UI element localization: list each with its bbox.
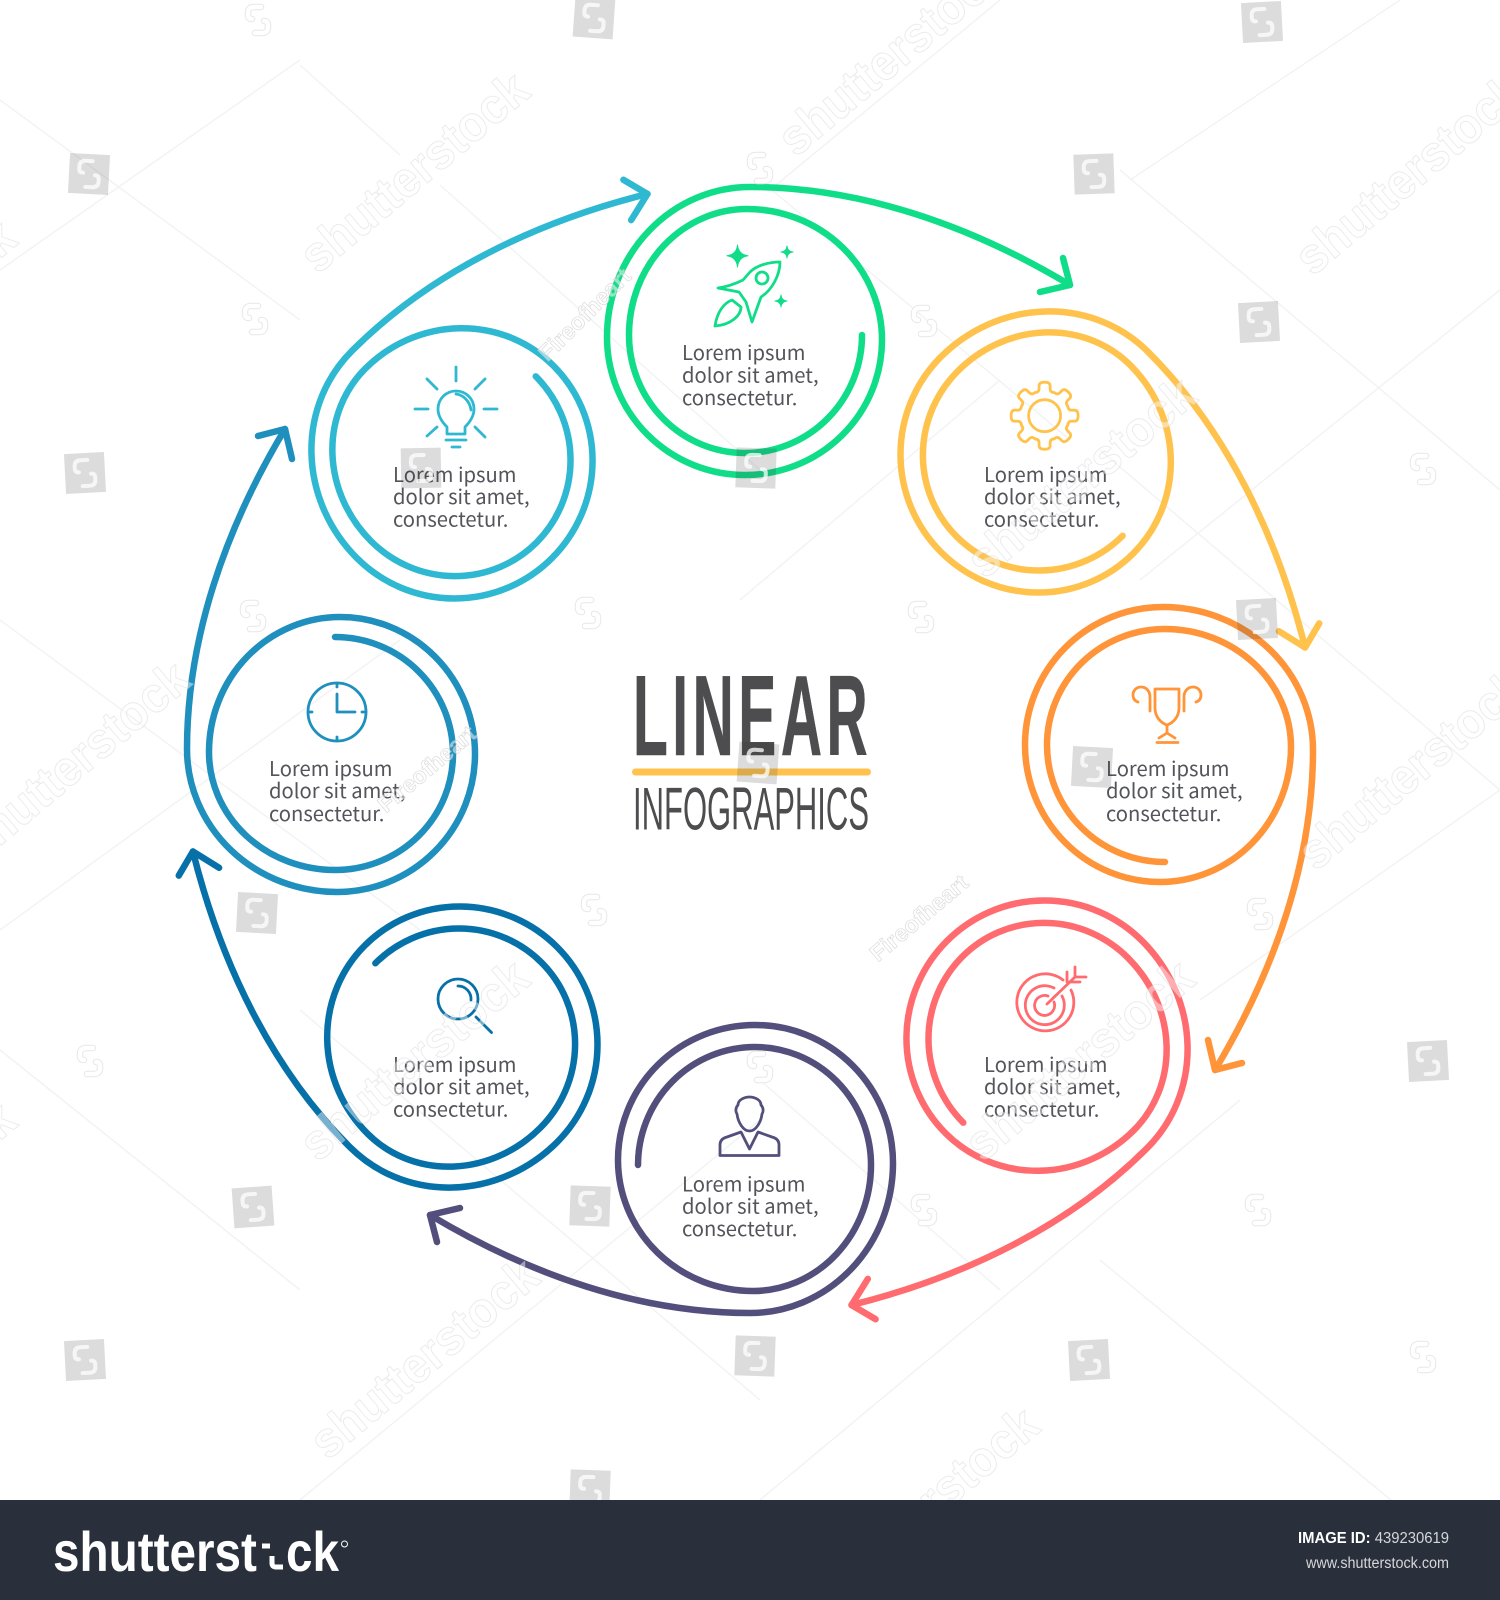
- text: step 4: Lorem ipsum: [984, 1049, 1107, 1078]
- panel: step 5 person: [430, 1025, 893, 1313]
- text: step 5: dolor sit amet,: [682, 1190, 819, 1220]
- icon: trophy: [1133, 687, 1201, 742]
- text: step 2: dolor sit amet,: [984, 481, 1121, 510]
- panel: step 6 magnifier: [124, 717, 655, 1248]
- chart: eight-step circular flow: [124, 125, 1374, 1374]
- subheading: INFOGRAPHICS: INFOGRAPHICS: [633, 776, 869, 842]
- footer logo: shutterstock: shutterstock: [53, 1520, 340, 1583]
- title block: [632, 653, 872, 842]
- text: step 1: Lorem ipsum: [682, 337, 805, 366]
- text: step 8: Lorem ipsum: [393, 459, 516, 488]
- spiral ring with arrow: green: [607, 187, 1070, 475]
- text: step 7: consectetur.: [269, 798, 384, 827]
- title underline: [632, 768, 871, 776]
- text: step 3: Lorem ipsum: [1106, 753, 1229, 782]
- icon: clock: [308, 683, 366, 741]
- text: step 6: consectetur.: [393, 1094, 508, 1122]
- watermark layer: Fireofheart: [372, 720, 481, 817]
- panel: step 8 light bulb: [251, 125, 782, 656]
- watermark layer: shutterstock: [954, 948, 1204, 1171]
- panel: step 2 gear: [843, 251, 1374, 782]
- watermark layer: shutterstock: [956, 365, 1206, 588]
- spiral ring with arrow: mid blue: [187, 429, 475, 892]
- footer image id: IMAGE ID: 439230619: [1298, 1530, 1449, 1547]
- watermark layer: shutterstock: [289, 948, 539, 1171]
- text: step 8: consectetur.: [393, 504, 508, 532]
- text: step 4: dolor sit amet,: [984, 1071, 1121, 1100]
- icon: light bulb: [415, 367, 497, 447]
- spiral ring with arrow: red: [717, 843, 1248, 1374]
- watermark layer: Fireofheart: [533, 262, 636, 366]
- watermark layer: shutterstock: [299, 1246, 549, 1469]
- text: step 4: consectetur.: [984, 1094, 1099, 1122]
- panel: step 3 trophy: [1025, 607, 1313, 1070]
- watermark layer: shutterstock: [289, 60, 539, 283]
- text: step 6: dolor sit amet,: [393, 1071, 530, 1100]
- icon: magnifier: [438, 979, 492, 1032]
- spiral ring with arrow: cyan: [251, 125, 782, 656]
- icon: target: [1017, 967, 1086, 1031]
- text: step 3: consectetur.: [1106, 798, 1221, 827]
- icon: person: [720, 1097, 779, 1156]
- text: step 1: dolor sit amet,: [682, 360, 819, 388]
- panel: step 1 rocket: [607, 187, 1070, 475]
- text: step 5: Lorem ipsum: [682, 1168, 805, 1198]
- footer url: www.shutterstock.com: [1305, 1555, 1449, 1572]
- text: step 6: Lorem ipsum: [393, 1049, 516, 1078]
- icon: rocket: [715, 245, 793, 326]
- text: step 8: dolor sit amet,: [393, 481, 530, 510]
- watermark layer: Fireofheart: [864, 869, 973, 966]
- text: step 7: dolor sit amet,: [269, 775, 406, 804]
- spiral ring with arrow: orange: [1025, 607, 1313, 1070]
- text: step 2: consectetur.: [984, 504, 1099, 532]
- panel: step 7 clock: [187, 429, 475, 892]
- text: step 2: Lorem ipsum: [984, 459, 1107, 488]
- text: step 3: dolor sit amet,: [1106, 775, 1243, 804]
- icon: gear: [1011, 382, 1078, 449]
- heading: LINEAR: LINEAR: [633, 653, 872, 780]
- footer bar: [0, 1500, 1500, 1600]
- text: step 5: consectetur.: [682, 1213, 797, 1242]
- spiral ring with arrow: yellow: [843, 251, 1374, 782]
- spiral ring with arrow: blue: [124, 717, 655, 1248]
- spiral ring with arrow: purple: [430, 1025, 893, 1313]
- panel: step 4 target: [717, 843, 1248, 1374]
- text: step 1: consectetur.: [682, 382, 797, 411]
- text: step 7: Lorem ipsum: [269, 753, 392, 782]
